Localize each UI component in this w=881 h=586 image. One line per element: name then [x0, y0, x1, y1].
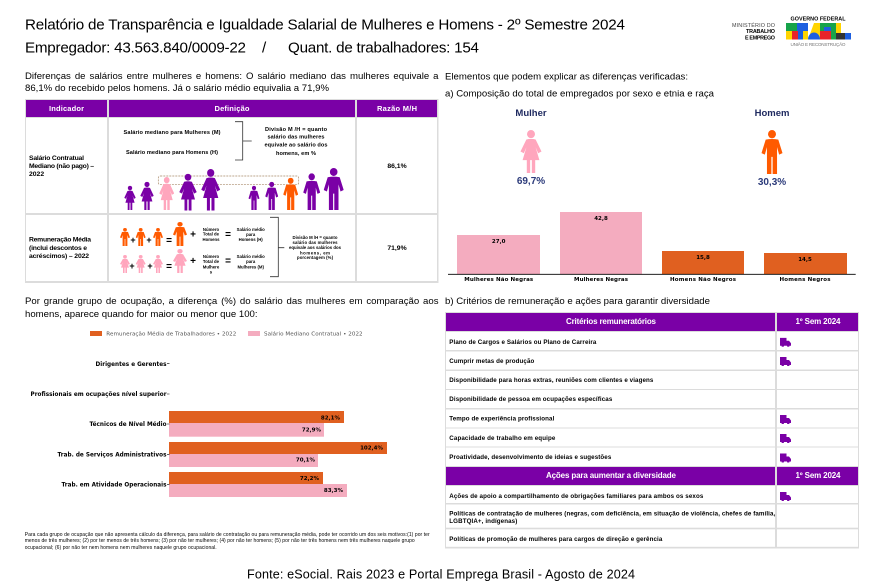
row 2 men formula: Homens (H)	[239, 237, 263, 242]
logo: governo federal brasil: UNIÃO E RECONSTRUÇÃO	[790, 41, 846, 47]
bar chart: composition	[448, 212, 856, 283]
row 2 definition text: salário das mulheres	[292, 240, 338, 245]
row 2 definition text: porcentagem (%)	[297, 255, 334, 260]
footnote: ocupacional; (6) por não ter nem homens nem mulheres naquele grupo ocupacional.	[25, 545, 217, 551]
row labels: Disponibilidade de pessoa em ocupações específicas	[449, 396, 613, 403]
row 2 men formula: =	[166, 236, 172, 246]
cells	[446, 332, 858, 547]
woman share: Mulher	[515, 108, 547, 119]
text block: salary difference intro: Diferenças de salários entre mulheres e homens: O salário mediano das mulheres equivale a 86,1% do recebido pelos homens. Já o salário médio equivalia a 71,9%	[25, 71, 438, 94]
table header: Definição	[214, 104, 250, 113]
bar chart: occupation groups: 72,9%	[302, 427, 321, 433]
logo: ministério: TRABALHO	[746, 29, 775, 35]
row 2 women formula	[120, 249, 265, 274]
row 2 indicator: (inclui descontos e	[29, 245, 87, 252]
row labels: Plano de Cargos e Salários ou Plano de Carreira	[449, 339, 597, 346]
panel: criteria table	[445, 312, 859, 548]
row 2 men formula: =	[225, 230, 231, 240]
row 2 women formula: +	[190, 256, 196, 267]
section heading: critérios: b) Critérios de remuneração e ações para garantir diversidade	[445, 296, 710, 307]
bar chart: occupation groups: 72,2%	[300, 476, 319, 482]
row cells	[26, 118, 437, 281]
bar chart: occupation groups: Trab. em Atividade Operacionais	[62, 482, 167, 488]
row 2 indicator	[29, 236, 91, 260]
row 2 men formula: +	[190, 230, 196, 240]
bar chart: occupation groups: 83,3%	[324, 488, 343, 494]
row labels: Tempo de experiência profissional	[449, 415, 555, 422]
bar chart: composition: 15,8	[696, 255, 710, 261]
bar chart: composition: Mulheres Negras	[574, 277, 629, 283]
bar chart: composition: 27,0	[492, 239, 506, 245]
table header: Razão M/H	[377, 104, 417, 113]
bar chart: occupation groups: Dirigentes e Gerentes	[96, 362, 167, 368]
row labels	[449, 339, 776, 543]
logo: ministério	[732, 22, 775, 42]
header: critérios	[446, 313, 858, 331]
bar chart: composition: 42,8	[594, 216, 608, 222]
table header	[26, 100, 437, 117]
row 2 women formula: s	[210, 270, 213, 274]
man share	[755, 108, 789, 188]
section heading: composição: a) Composição do total de empregados por sexo e etnia e raça	[445, 88, 715, 100]
employer line: Empregador: 43.563.840/0009-22	[25, 39, 246, 56]
header: critérios: Critérios remuneratórios	[566, 317, 657, 326]
footnote: menos de três mulheres; (2) por ter menos de três homens; (3) por não ter mulheres; (4) por não ter homens; (5) por não ter três homens nem três mulheres naquele grupo	[25, 538, 415, 544]
row 1 indicator	[29, 155, 94, 178]
row labels: Políticas de promoção de mulheres para cargos de direção e gerência	[449, 536, 663, 543]
row 1 indicator: Mediano (não pago) –	[29, 163, 94, 170]
row 2 brace	[270, 217, 284, 277]
row 2 definition text	[289, 235, 342, 260]
bar chart: composition: Homens Não Negros	[670, 277, 737, 283]
row 2 men formula: +	[146, 235, 152, 245]
row labels: LGBTQIA+, indígenas)	[449, 518, 517, 525]
check icons	[780, 338, 791, 501]
row 1 indicator: 2022	[29, 171, 44, 178]
row 2 definition text: equivale aos salários dos	[289, 245, 342, 250]
text block: occupation intro: Por grande grupo de ocupação, a diferença (%) do salário das mulheres em comparação aos homens, aparece quando for maior ou menor que 100:	[25, 296, 438, 320]
title: Relatório de Transparência e Igualdade Salarial de Mulheres e Homens - 2º Semestre 2024	[25, 17, 625, 34]
row 2 men formula: Salário médio	[237, 227, 265, 232]
bar chart: composition: Homens Negros	[780, 277, 831, 283]
row 1 ratio: 86,1%	[387, 163, 407, 170]
woman share: 69,7%	[517, 176, 545, 187]
legend: Salário Mediano Contratual • 2022	[264, 330, 363, 338]
row 1 indicator: Salário Contratual	[29, 155, 84, 162]
row 1 definition text: equivale ao salário dos	[264, 143, 328, 149]
employer line: /	[262, 39, 267, 56]
row 2 women formula: +	[147, 261, 153, 271]
bar chart: occupation groups: Profissionais em ocupações nível superior	[30, 391, 167, 398]
bar chart: occupation groups	[30, 362, 387, 497]
row 1 definition text: Salário mediano para Homens (H)	[126, 150, 218, 156]
row 1 definition text: homens, em %	[276, 151, 316, 157]
logo: ministério: E EMPREGO	[745, 36, 775, 42]
row 2 men formula: Homens	[203, 237, 220, 242]
row 2 women formula: +	[129, 261, 135, 271]
bar chart: occupation groups: Trab. de Serviços Administrativos	[58, 452, 167, 458]
row labels: Políticas de contratação de mulheres (negras, com deficiência, em situação de violência, chefes de família,	[449, 510, 776, 517]
logo: governo federal brasil: GOVERNO FEDERAL	[790, 16, 846, 22]
row 1 definition text: salário das mulheres	[268, 135, 324, 141]
man share: Homem	[755, 108, 789, 119]
row 2 indicator: acréscimos) – 2022	[29, 253, 89, 260]
table header: Indicador	[49, 104, 84, 113]
panel: indicator table	[25, 99, 438, 283]
row 2 women formula: =	[166, 262, 172, 272]
section heading: elementos: Elementos que podem explicar as diferenças verificadas:	[445, 72, 688, 83]
row 2 men formula: para	[246, 232, 256, 237]
row 2 women formula: Total de	[203, 259, 220, 264]
header: ações: Ações para aumentar a diversidade	[546, 471, 677, 480]
row 1 definition text	[124, 127, 328, 157]
bar chart: occupation groups: 70,1%	[296, 458, 315, 464]
bar chart: composition: Mulheres Não Negras	[464, 277, 534, 283]
row 2 women formula: Número	[203, 254, 219, 259]
row 2 women formula: =	[225, 256, 231, 267]
row 2 women formula: Mulheres (M)	[237, 264, 265, 269]
row 2 women formula: para	[246, 259, 256, 264]
row 1 definition text: Salário mediano para Mulheres (M)	[124, 130, 221, 136]
legend	[90, 330, 363, 338]
row 2 men formula: Número	[203, 227, 219, 232]
row 2 men formula: Total de	[203, 232, 220, 236]
row 2 men formula: +	[130, 235, 136, 245]
logo: governo federal brasil	[786, 16, 851, 47]
row 2 indicator: Remuneração Média	[29, 236, 91, 244]
logo: ministério: MINISTÉRIO DO	[732, 22, 775, 29]
header: ações: 1º Sem 2024	[796, 471, 841, 480]
row labels: Cumprir metas de produção	[449, 358, 535, 365]
row labels: Ações de apoio a compartilhamento de obrigações familiares para ambos os sexos	[449, 493, 704, 500]
row 2 women formula: Salário médio	[237, 254, 265, 259]
row 2 definition text: Divisão M /H = quanto	[292, 235, 338, 240]
row labels: Disponibilidade para horas extras, reuniões com clientes e viagens	[449, 377, 654, 384]
row 2 ratio: 71,9%	[387, 245, 407, 252]
row 1 brace	[235, 122, 252, 160]
row 1 definition text: Divisão M /H = quanto	[265, 127, 328, 133]
bar chart: occupation groups: 102,4%	[360, 446, 383, 452]
woman share	[515, 108, 547, 187]
employer line	[25, 39, 479, 56]
row 2 women formula: Mulhere	[203, 264, 220, 269]
row 2 men formula	[120, 222, 265, 246]
man share: 30,3%	[758, 177, 786, 188]
bar chart: composition: 14,5	[798, 257, 812, 263]
row labels: Capacidade de trabalho em equipe	[449, 435, 556, 442]
footnote: Para cada grupo de ocupação que não apresenta cálculo da diferença, para salário de contratação ou para remuneração média, pode ter ocorrido um dos seis motivos:(1) por ter	[25, 532, 430, 538]
row 1 people figures	[124, 168, 344, 210]
row 2 definition text: homens, em	[300, 250, 330, 256]
row labels: Proatividade, desenvolvimento de ideias e sugestões	[449, 454, 612, 461]
bar chart: occupation groups: 82,1%	[321, 415, 340, 421]
source: Fonte: eSocial. Rais 2023 e Portal Emprega Brasil - Agosto de 2024	[247, 568, 635, 582]
footnote	[25, 532, 430, 551]
header: ações	[446, 467, 858, 485]
employer line: Quant. de trabalhadores: 154	[288, 39, 479, 56]
header: critérios: 1º Sem 2024	[796, 317, 841, 326]
legend: Remuneração Média de Trabalhadores • 2022	[106, 330, 236, 338]
bar chart: occupation groups: Técnicos de Nível Médio	[90, 421, 167, 428]
